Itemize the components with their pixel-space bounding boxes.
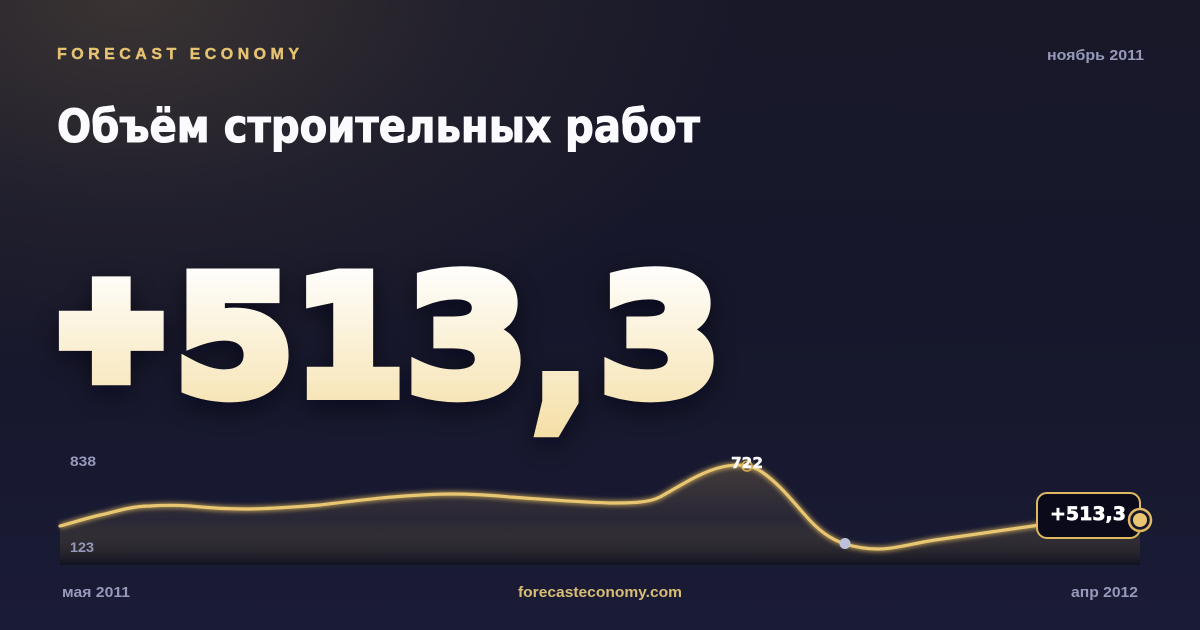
big number value: 3 [599,242,721,434]
big number shadow: 3 [406,250,528,442]
low point marker [840,538,850,549]
big number shadow: + [57,257,166,414]
source website: forecasteconomy.com [518,584,682,601]
chart line [60,465,1140,549]
axis max label: 838 [70,453,96,469]
axis min label: 123 [70,539,94,555]
big number shadow: , [533,264,588,455]
big number value: 5 [174,242,294,433]
date: report month: ноябрь 2011 [1047,47,1144,64]
x axis start label: мая 2011 [62,585,130,601]
big number value: 3 [406,242,528,434]
title: Объём строительных работ [57,100,700,153]
big number [57,242,721,455]
peak value: 722 [731,454,763,472]
current point marker [1129,509,1151,531]
big number value: + [57,249,166,406]
eyebrow: brand name: FORECAST ECONOMY [57,46,299,63]
big number shadow: 5 [174,250,294,441]
big number shadow: 3 [599,250,721,442]
big number shadow [57,250,721,455]
big number value: 1 [294,243,405,434]
sparkline chart [60,453,1151,565]
big number value: , [533,256,588,447]
chart line glow [60,465,1140,549]
current value callout: +513,3 [1050,503,1126,525]
big number value [57,242,721,447]
chart area fill [60,465,1140,565]
peak marker [742,461,752,471]
current value callout [1037,493,1140,538]
big number shadow: 1 [294,251,405,442]
x axis end label: апр 2012 [1071,585,1138,601]
